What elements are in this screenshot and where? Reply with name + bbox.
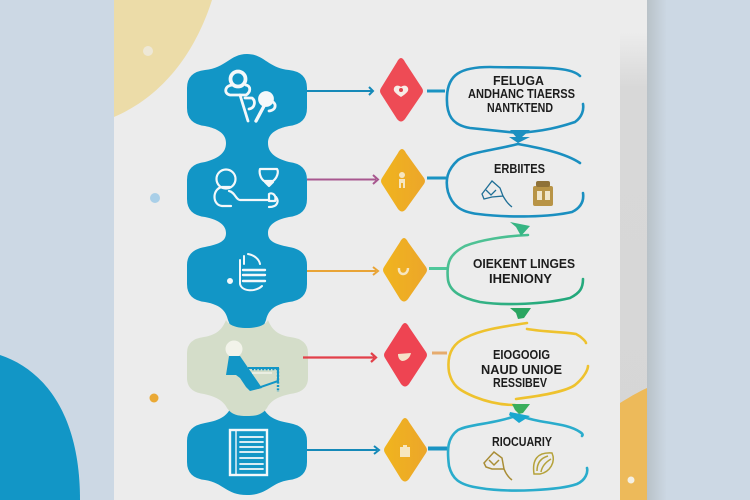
callout 1: box — [447, 67, 583, 143]
diamond 4 — [384, 323, 427, 386]
icon: list page — [230, 430, 267, 475]
callout 4: text — [481, 347, 562, 390]
arrow 2 — [307, 175, 378, 184]
callout 5: box — [448, 412, 587, 491]
callout 4: arrow — [512, 404, 530, 414]
callout 3: bottom arrow — [510, 308, 531, 319]
decoration: top-left cream shape — [114, 0, 212, 117]
callout 3: box — [448, 222, 583, 319]
callout 3: text: OIEKENT LINGES — [473, 256, 575, 271]
spine of connected blue blocks — [187, 54, 307, 330]
bottom blue block — [187, 405, 307, 495]
callout 1: down arrow — [509, 130, 530, 143]
callout 2: icon house hand — [482, 181, 512, 207]
callout 2: icon bag — [533, 181, 553, 206]
decoration: bottom-left blue shape — [0, 355, 80, 500]
callout 5: icon house hand — [484, 452, 512, 480]
callout 2: text: ERBIITES — [494, 161, 545, 176]
callout 3: top arrow — [510, 222, 530, 236]
callout 1: text: NANTKTEND — [487, 100, 553, 115]
arrow 3 — [307, 267, 378, 275]
icon: person at desk — [226, 340, 278, 392]
icon: two people with pins — [226, 72, 275, 121]
icon: document — [228, 254, 265, 290]
diamond 5 — [384, 418, 427, 482]
arrow 5 — [307, 446, 379, 454]
callout 2: box — [447, 144, 583, 216]
callout 5: text: RIOCUARIY — [492, 434, 552, 449]
connector stubs — [427, 91, 447, 448]
arrow 4 — [303, 353, 376, 362]
callout 5: icon leaf — [534, 453, 553, 474]
callout 4: text: NAUD UNIOE — [481, 362, 562, 377]
page side strip — [620, 32, 647, 500]
pale block — [187, 320, 308, 416]
page panel — [114, 0, 647, 500]
callout 1: text: FELUGA — [493, 73, 545, 88]
icon: person with cup — [214, 169, 278, 207]
diamond 1 — [380, 58, 423, 122]
callout 1: text — [468, 73, 575, 115]
page shadow — [647, 0, 667, 500]
diamond 3 — [383, 238, 427, 302]
callout 4: text: EIOGOOIG — [493, 347, 550, 362]
callout 4: text: RESSIBEV — [493, 375, 547, 390]
callout 4: box — [448, 323, 588, 414]
callout 1: text: ANDHANC TIAERSS — [468, 86, 575, 101]
callout 5: top arrow — [509, 412, 530, 423]
callout 3: text — [473, 256, 575, 286]
diamond 2 — [381, 149, 425, 212]
decoration: dots — [150, 193, 160, 402]
callout 3: text: IHENIONY — [489, 271, 552, 286]
arrow 1 — [307, 87, 373, 95]
decoration: bottom-right yellow shape — [620, 388, 647, 500]
